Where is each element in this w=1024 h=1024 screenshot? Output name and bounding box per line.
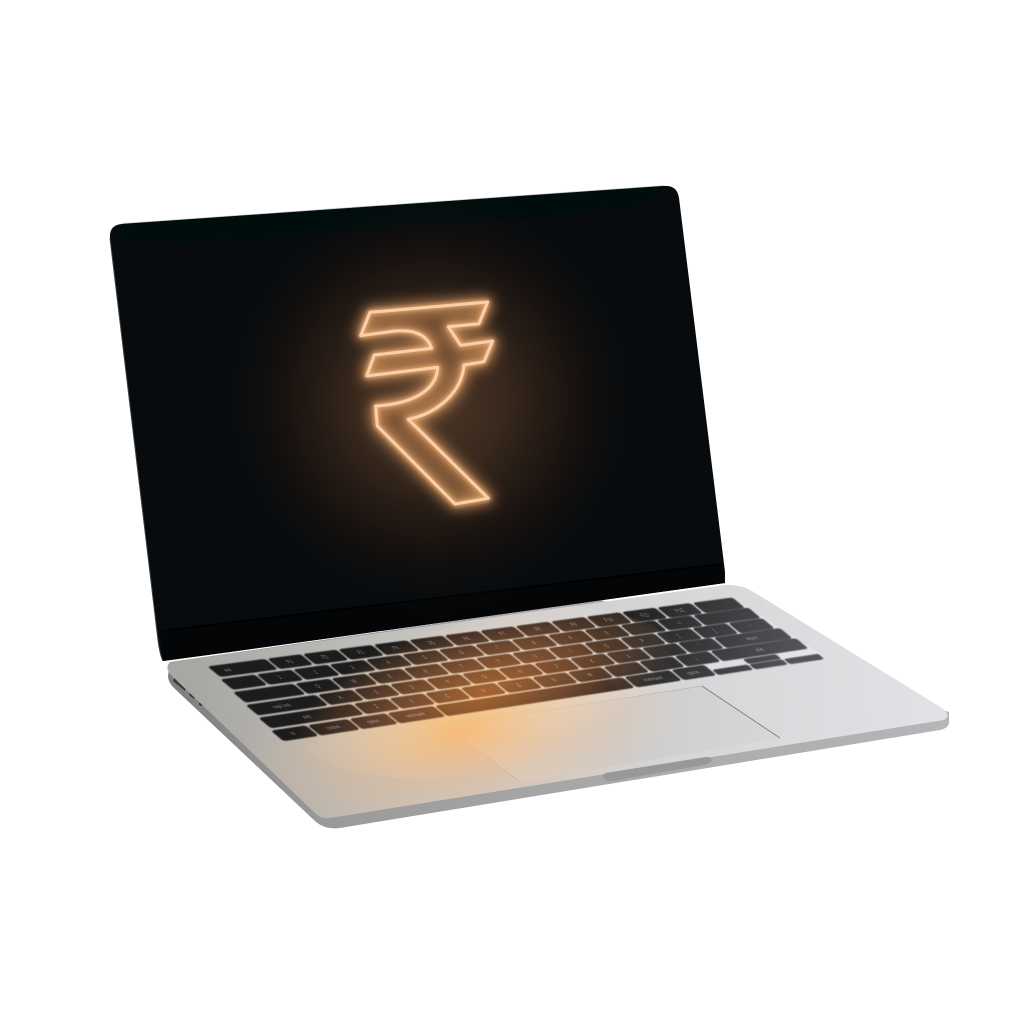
function row legends: F12	[674, 608, 688, 614]
key row 4	[246, 628, 793, 715]
lid bottom bezel	[160, 564, 725, 661]
rupee tube	[361, 302, 493, 504]
keyboard	[208, 597, 824, 741]
rupee symbol neon	[361, 302, 493, 504]
function row legends: F2	[320, 655, 331, 660]
laptop lid	[110, 186, 725, 661]
lid left rim	[110, 238, 163, 661]
warm glow on deck	[167, 585, 948, 818]
modifier key legends: option	[365, 719, 382, 725]
rupee halo	[361, 302, 493, 504]
modifier key legends: control	[325, 725, 343, 731]
function row legends: F7	[498, 632, 509, 637]
modifier key legends: fn	[289, 731, 298, 737]
modifier key legends	[222, 636, 767, 737]
key row 3	[233, 618, 775, 703]
rupee wide glow	[361, 302, 493, 504]
front notch	[603, 757, 712, 781]
modifier key legends: return	[744, 636, 761, 642]
function row legends: F3	[356, 650, 367, 656]
function row legends: F11	[639, 613, 652, 619]
bezel line	[168, 564, 722, 630]
modifier key legends: shift	[754, 647, 767, 653]
modifier key legends: option	[685, 670, 702, 676]
modifier key legends: caps lock	[271, 703, 294, 710]
modifier key legends: shift	[301, 714, 314, 720]
qwerty row legends: QWERTYUIOP[]\	[314, 624, 755, 689]
key row 2	[220, 608, 761, 690]
side ports	[173, 678, 203, 706]
function row legends: F1	[285, 660, 296, 665]
laptop deck	[167, 585, 948, 818]
trackpad	[447, 686, 780, 782]
key row 5	[258, 638, 809, 728]
bottom letter row legends: ZXCVBNM,./	[373, 657, 701, 709]
function row legends: F4	[391, 646, 402, 651]
illustration: laptop with neon rupee	[110, 185, 949, 828]
home row legends: ASDFGHJKL;'	[337, 644, 704, 700]
screen glow	[260, 220, 599, 570]
modifier key legends: command	[642, 676, 666, 683]
keyboard light on right	[560, 597, 827, 692]
key row 6	[271, 648, 824, 741]
screen top bezel	[118, 186, 664, 243]
function row legends: F10	[603, 618, 617, 623]
warm glow on keys	[303, 606, 666, 760]
function row legends: F9	[569, 622, 580, 628]
function row legends: F6	[462, 636, 473, 642]
function row legends: F8	[533, 627, 544, 632]
modifier key legends: command	[404, 712, 428, 719]
modifier key legends: esc	[222, 668, 235, 673]
laptop base edge	[168, 600, 949, 828]
key row 1	[208, 597, 745, 677]
function row legends: F5	[427, 641, 438, 646]
key legends	[222, 608, 767, 737]
number row legends: `1234567890-=	[241, 621, 685, 685]
